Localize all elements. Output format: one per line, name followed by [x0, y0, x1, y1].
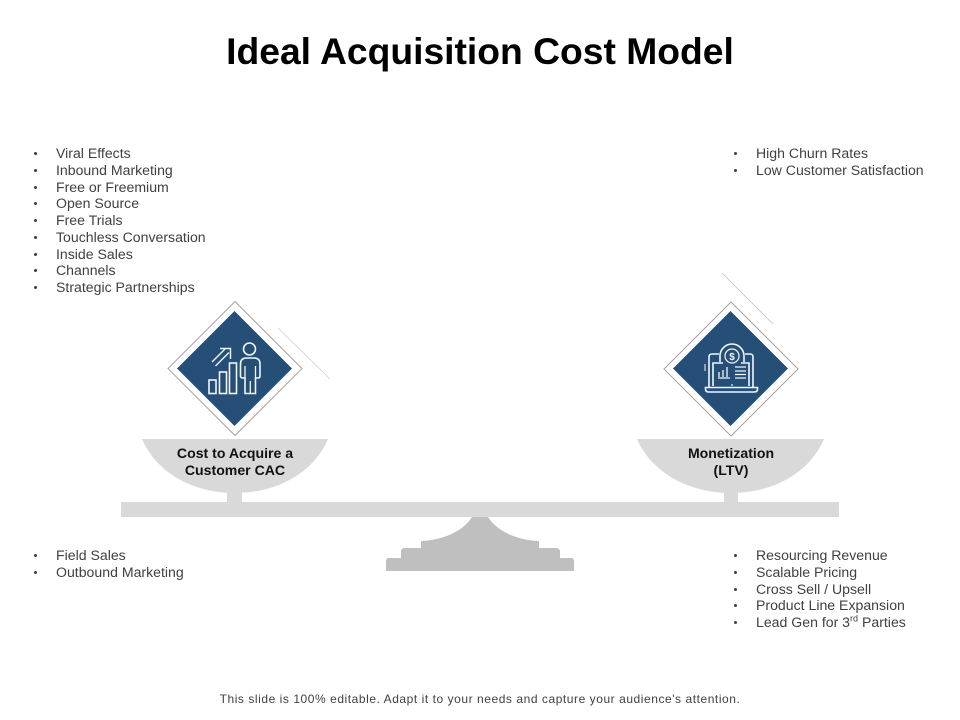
right bowl: [637, 439, 824, 493]
text block: top left list: Open Source: [56, 195, 139, 211]
text block: top right list: Low Customer Satisfaction: [756, 162, 924, 178]
text block: top left list: Free Trials: [56, 212, 123, 228]
right accent line: [722, 273, 773, 324]
text block: bottom right list: Product Line Expansion: [756, 597, 905, 613]
icon: laptop with dollar coin: [705, 344, 758, 392]
text block: bottom right list: Resourcing Revenue: [756, 547, 888, 563]
scale base: [386, 517, 574, 571]
text block: top right list: High Churn Rates: [756, 145, 868, 161]
text block: top left list: Inbound Marketing: [56, 162, 173, 178]
text block: top right list: [734, 145, 924, 178]
text block: top left list: Strategic Partnerships: [56, 279, 195, 295]
left bowl: [142, 439, 328, 493]
text block: top left list: Free or Freemium: [56, 179, 169, 195]
text block: top left list: Channels: [56, 262, 116, 278]
footer note: This slide is 100% editable. Adapt it to your needs and capture your audience's attention.: [220, 692, 740, 706]
icon: person with growth chart: [209, 343, 260, 394]
text block: bottom left list: Field Sales: [56, 547, 126, 563]
right bowl label: Monetization: [688, 445, 774, 461]
text block: bottom right list: Cross Sell / Upsell: [756, 581, 871, 597]
text block: top left list: Inside Sales: [56, 246, 133, 262]
text block: bottom left list: [34, 547, 184, 580]
text block: top left list: Viral Effects: [56, 145, 131, 161]
text block: bottom right list: [734, 547, 906, 630]
left accent line: [278, 328, 330, 379]
left diamond: [168, 302, 302, 436]
text block: bottom right list: Lead Gen for 3rd Parties: [756, 613, 906, 630]
scale beam and stems: [121, 490, 839, 517]
right diamond: [664, 302, 798, 436]
text block: top left list: Touchless Conversation: [56, 229, 206, 245]
text block: bottom right list: Scalable Pricing: [756, 564, 857, 580]
left bowl label: [177, 445, 294, 478]
left bowl label: Cost to Acquire a: [177, 445, 293, 461]
title: Ideal Acquisition Cost Model: [226, 30, 734, 72]
right bowl label: (LTV): [714, 462, 748, 478]
text block: top left list: [34, 145, 206, 295]
left bowl label: Customer CAC: [185, 462, 285, 478]
icon: laptop with dollar coin: $: [729, 352, 735, 363]
text block: bottom left list: Outbound Marketing: [56, 564, 184, 580]
right bowl label: [688, 445, 774, 478]
